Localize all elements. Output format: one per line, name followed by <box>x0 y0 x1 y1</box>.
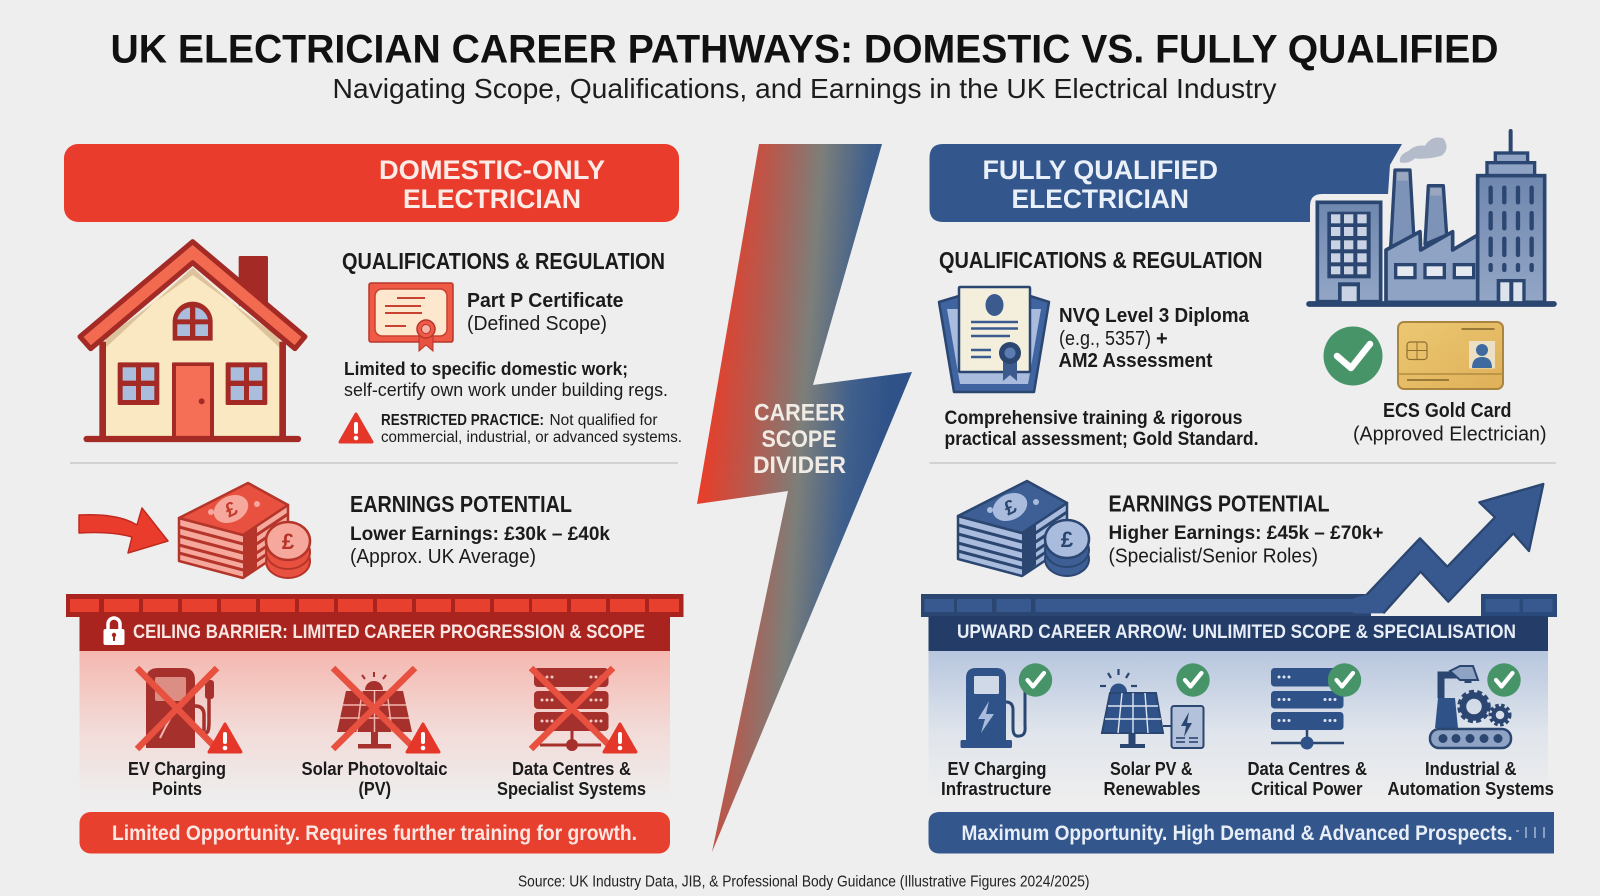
icon: warning triangle <box>340 414 372 442</box>
panel: fully qualified electrician <box>921 131 1557 854</box>
text: data centres and critical power: Critical Power <box>1251 778 1362 799</box>
text: career scope divider <box>753 400 846 479</box>
available systems background <box>928 651 1548 801</box>
ceiling barrier <box>66 594 684 651</box>
text: ecs gold card <box>1353 400 1546 446</box>
text: scope limitation <box>344 358 668 400</box>
icon: green check <box>1324 326 1382 386</box>
source line: Source: UK Industry Data, JIB, & Professional Body Guidance (Illustrative Figures 2024/2025) <box>518 874 1090 890</box>
text: comprehensive training: Comprehensive training & rigorous <box>944 408 1242 429</box>
text: solar photovoltaic <box>302 758 448 799</box>
icon: nvq diploma <box>939 287 1049 392</box>
icon: blue money stack <box>958 481 1089 576</box>
heading banner: fully qualified: ELECTRICIAN <box>1012 184 1189 214</box>
text: ev charging infrastructure <box>941 758 1052 799</box>
restricted systems background <box>80 651 670 801</box>
text: earnings potential <box>350 491 610 568</box>
text: ev charging points: EV Charging <box>128 758 226 779</box>
icon: blue money stack: £ <box>1001 496 1020 520</box>
panel: domestic-only electrician <box>64 144 684 854</box>
text: data centres: Specialist Systems <box>497 778 646 799</box>
text: scope limitation: Limited to specific domestic work; <box>344 358 628 379</box>
text: scope limitation: self-certify own work under building regs. <box>344 380 668 400</box>
text: part p certificate: Part P Certificate <box>467 290 624 312</box>
heading banner: domestic-only: DOMESTIC-ONLY <box>379 155 605 185</box>
text: industrial and automation systems: Industrial & <box>1425 758 1516 779</box>
text: part p certificate: (Defined Scope) <box>467 313 607 335</box>
icon: house <box>80 242 305 439</box>
text: ecs gold card: (Approved Electrician) <box>1353 424 1546 446</box>
text: earnings potential: Lower Earnings: £30k – £40k <box>350 523 610 545</box>
icon: red money stack: £ <box>282 529 295 554</box>
text: industrial and automation systems: Automation Systems <box>1388 778 1554 799</box>
icon: part p certificate <box>369 283 453 351</box>
qualifications heading: QUALIFICATIONS & REGULATION <box>939 247 1262 273</box>
text: ev charging points <box>128 758 226 799</box>
icon: red money stack: £ <box>222 498 241 522</box>
qualifications heading: QUALIFICATIONS & REGULATION <box>342 248 665 274</box>
ceiling barrier label: CEILING BARRIER: LIMITED CAREER PROGRESSION & SCOPE <box>133 621 645 643</box>
heading banner: domestic-only: ELECTRICIAN <box>403 184 581 214</box>
text: ecs gold card: ECS Gold Card <box>1383 400 1512 422</box>
text: data centres and critical power <box>1248 758 1367 799</box>
text: solar photovoltaic: Solar Photovoltaic <box>302 758 448 779</box>
text: nvq level 3 diploma: AM2 Assessment <box>1058 350 1213 372</box>
text: earnings potential <box>1108 490 1384 568</box>
text: career scope divider: DIVIDER <box>753 452 846 479</box>
icon: city and industry buildings <box>1309 131 1554 304</box>
upward career label: UPWARD CAREER ARROW: UNLIMITED SCOPE & SPECIALISATION <box>957 621 1516 643</box>
text: earnings potential: EARNINGS POTENTIAL <box>1108 490 1330 516</box>
icon: solar pv <box>1100 663 1210 748</box>
text: part p certificate <box>467 290 624 335</box>
text: solar photovoltaic: (PV) <box>358 778 391 799</box>
career ceiling with breakthrough <box>921 484 1557 651</box>
text: solar pv and renewables: Renewables <box>1104 778 1200 799</box>
heading banner: domestic-only <box>64 144 679 222</box>
text: earnings potential: EARNINGS POTENTIAL <box>350 491 572 517</box>
arrow: pointing to low earnings <box>79 508 168 553</box>
icon: data centres <box>1271 663 1361 750</box>
text: nvq level 3 diploma: (e.g., 5357) <box>1059 328 1151 350</box>
callout: limited opportunity <box>80 812 670 854</box>
icon: blocked data centres <box>531 668 636 752</box>
text: earnings potential: Higher Earnings: £45k – £70k+ <box>1108 522 1384 544</box>
icon: industrial automation <box>1430 663 1521 748</box>
text: ev charging infrastructure: Infrastructure <box>941 778 1052 799</box>
icon: red money stack <box>179 483 310 578</box>
text: nvq level 3 diploma <box>1058 305 1250 372</box>
title: UK ELECTRICIAN CAREER PATHWAYS: DOMESTIC VS. FULLY QUALIFIED <box>110 28 1498 72</box>
text: comprehensive training <box>944 408 1258 450</box>
text: comprehensive training: practical assessment; Gold Standard. <box>944 429 1258 450</box>
icon: blue money stack: £ <box>1061 527 1074 552</box>
icon: blocked solar pv <box>333 668 439 752</box>
callout: maximum opportunity: Maximum Opportunity. High Demand & Advanced Prospects. <box>962 822 1512 845</box>
text: earnings potential: (Approx. UK Average) <box>350 546 536 568</box>
subtitle: Navigating Scope, Qualifications, and Earnings in the UK Electrical Industry <box>332 73 1277 104</box>
icon: ecs gold card <box>1398 322 1503 389</box>
text: restricted practice: Not qualified for <box>550 412 658 429</box>
text: earnings potential: (Specialist/Senior Roles) <box>1108 546 1318 568</box>
text: solar pv and renewables: Solar PV & <box>1110 758 1192 779</box>
callout: limited opportunity: Limited Opportunity. Requires further training for growth. <box>112 822 637 845</box>
text: solar pv and renewables <box>1104 758 1200 799</box>
text: restricted practice <box>381 412 682 446</box>
heading banner: fully qualified <box>930 144 1402 222</box>
text: ev charging infrastructure: EV Charging <box>948 758 1046 779</box>
icon: blocked ev charging <box>137 668 241 752</box>
divider: lightning bolt <box>697 144 912 852</box>
text: ev charging points: Points <box>152 778 202 799</box>
text: data centres <box>497 758 646 799</box>
text: industrial and automation systems <box>1388 758 1554 799</box>
heading banner: fully qualified: FULLY QUALIFIED <box>982 155 1218 185</box>
callout: maximum opportunity <box>928 812 1554 854</box>
text: data centres: Data Centres & <box>512 758 631 779</box>
text: career scope divider: SCOPE <box>762 426 836 453</box>
arrow: upward career <box>1353 484 1543 613</box>
text: nvq level 3 diploma: NVQ Level 3 Diploma <box>1059 305 1250 327</box>
icon: padlock <box>104 618 124 645</box>
text: career scope divider: CAREER <box>754 400 845 426</box>
text: restricted practice: RESTRICTED PRACTICE: <box>381 412 544 429</box>
text: data centres and critical power: Data Centres & <box>1248 758 1367 779</box>
icon: ev charging <box>960 663 1052 748</box>
text: nvq level 3 diploma: + <box>1156 328 1168 350</box>
text: restricted practice: commercial, industrial, or advanced systems. <box>381 429 682 446</box>
